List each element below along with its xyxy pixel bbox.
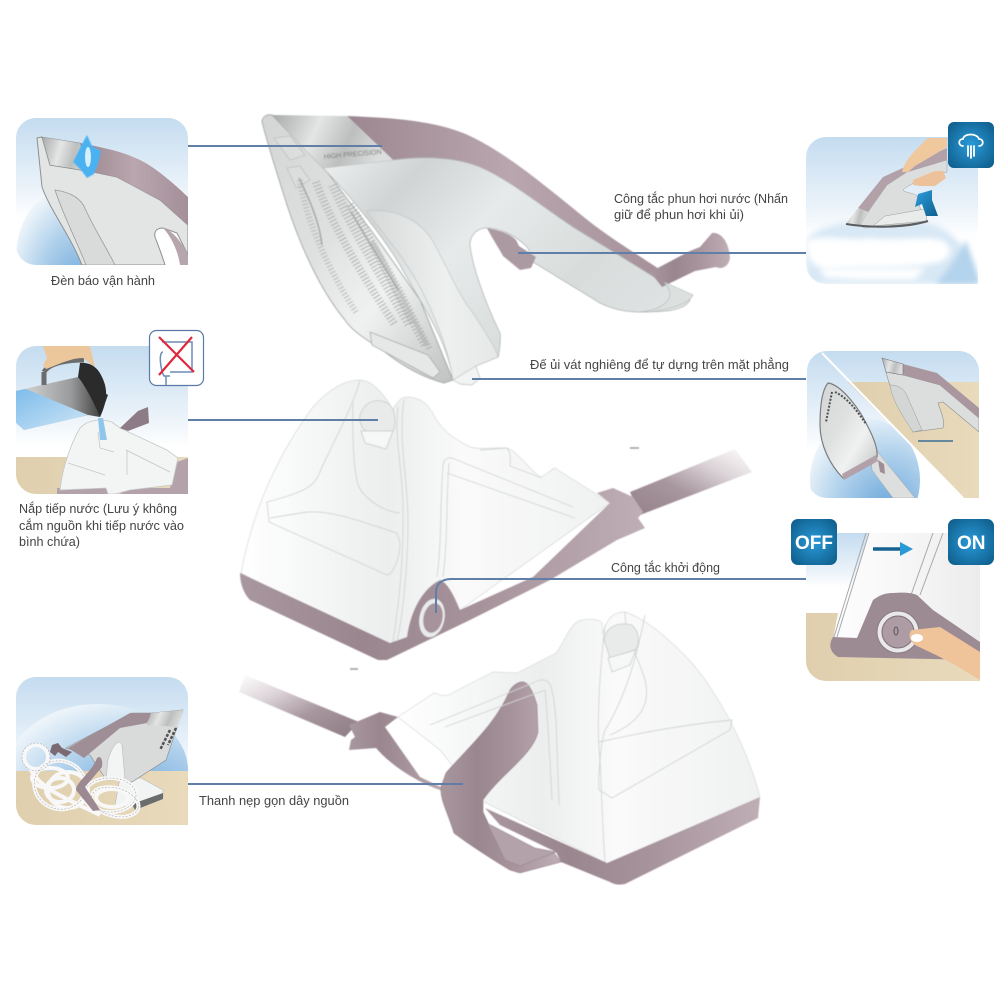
model label: HIGH PRECISION xyxy=(324,149,382,161)
panel: steam use xyxy=(806,137,980,284)
surface line xyxy=(918,440,953,442)
body edges xyxy=(834,533,943,637)
label: steam switch xyxy=(614,191,788,222)
label: water fill cap: cắm nguồn khi tiếp nước vào xyxy=(19,518,184,533)
steam lower xyxy=(820,268,925,280)
panel: power switch xyxy=(806,533,980,681)
sky divider xyxy=(822,353,963,498)
red cross xyxy=(159,337,194,375)
iron vents xyxy=(160,728,176,750)
main iron illustration xyxy=(262,115,730,385)
label: water fill cap: bình chứa) xyxy=(19,535,80,549)
fingernail xyxy=(911,634,923,642)
upper side panel xyxy=(890,385,922,432)
iron base xyxy=(115,778,163,807)
inner side panel xyxy=(366,211,498,380)
handle xyxy=(44,360,84,385)
blue corner xyxy=(935,240,980,284)
iron body xyxy=(66,710,183,782)
plum handle xyxy=(858,148,947,212)
arrow up xyxy=(915,190,938,216)
sand xyxy=(16,457,188,494)
lower sole vents xyxy=(826,392,866,424)
lower iron handle xyxy=(870,440,915,498)
base contour lines xyxy=(267,380,575,642)
hand xyxy=(43,346,95,369)
panel: cord storage xyxy=(8,677,188,836)
badge: OFF: OFF xyxy=(795,533,833,554)
cord wrap clip xyxy=(441,682,561,873)
trigger xyxy=(878,460,885,474)
sole xyxy=(846,221,928,227)
power cord xyxy=(630,449,752,515)
label: indicator light: Đèn báo vận hành xyxy=(51,274,155,288)
white tail xyxy=(106,742,125,780)
silver band xyxy=(42,136,82,170)
sand xyxy=(16,771,188,825)
upper iron body xyxy=(886,372,979,432)
indicator glow xyxy=(73,135,101,178)
steam dome xyxy=(806,220,978,284)
panel: heel rest xyxy=(807,351,979,498)
dome xyxy=(8,704,188,836)
speck xyxy=(630,447,639,449)
cord shading xyxy=(22,743,142,822)
panel: water filling xyxy=(15,346,188,494)
label: water fill cap xyxy=(19,501,184,549)
steam trigger xyxy=(487,228,536,270)
cord xyxy=(239,675,359,737)
power switch xyxy=(415,596,449,640)
dome xyxy=(810,420,920,498)
badge: ON: ON xyxy=(957,533,986,554)
steam cloud xyxy=(806,238,950,270)
plum housing xyxy=(830,593,980,660)
switch ring xyxy=(877,611,919,653)
lower iron sole xyxy=(820,383,877,478)
label: steam switch: Công tắc phun hơi nước (Nhấn xyxy=(614,191,788,206)
heel stand xyxy=(453,366,480,385)
label: steam switch: giữ để phun hơi khi ủi) xyxy=(614,208,744,222)
arm and collar xyxy=(349,712,450,795)
iron body xyxy=(37,137,188,265)
indicator core xyxy=(85,147,91,167)
base white body xyxy=(241,380,610,650)
silver panel xyxy=(272,115,393,168)
notch handle edge xyxy=(163,228,188,265)
base plum trim xyxy=(240,488,645,660)
iron body xyxy=(860,160,947,228)
badge: OFF xyxy=(791,519,837,565)
water cap xyxy=(604,624,638,672)
water tank base unit xyxy=(240,380,752,660)
base contour lines xyxy=(430,612,732,862)
wound cord xyxy=(24,745,142,822)
base plum bottom xyxy=(57,458,188,494)
sky xyxy=(806,533,868,613)
cord wrap base unit xyxy=(239,612,760,885)
sand xyxy=(848,382,979,498)
base white body xyxy=(60,420,178,494)
iron silver xyxy=(147,710,183,727)
upper silver xyxy=(882,358,903,375)
cord connector xyxy=(650,233,730,287)
water fill cap xyxy=(360,401,395,449)
label: heel rest: Đế ủi vát nghiêng để tự dựng trên mặt phẳng xyxy=(530,357,789,372)
tail cover xyxy=(640,282,693,312)
iron plum top xyxy=(68,713,152,758)
bottom plum trim xyxy=(485,797,760,885)
switch rocker xyxy=(882,616,914,648)
plum clip xyxy=(76,757,102,811)
iron handle xyxy=(347,116,672,282)
iron soleplate xyxy=(262,115,453,383)
label: cord wrap: Thanh nẹp gọn dây nguồn xyxy=(199,794,349,808)
speck xyxy=(350,668,358,670)
sand xyxy=(806,613,980,681)
side panel line xyxy=(55,190,115,265)
crossed socket xyxy=(160,342,192,385)
pitcher water xyxy=(15,389,88,430)
leader lines xyxy=(188,146,806,784)
cord connector xyxy=(50,743,72,757)
warning icon: do not fill while plugged xyxy=(150,330,204,386)
blue dome xyxy=(16,199,82,265)
side panel xyxy=(873,209,927,226)
water stream xyxy=(98,418,107,440)
base outlines xyxy=(68,432,170,475)
upper plum handle xyxy=(903,364,979,418)
label: power switch: Công tắc khởi động xyxy=(611,560,720,575)
silver nose xyxy=(846,208,868,225)
pitcher black back xyxy=(78,363,106,417)
arrow off to on xyxy=(873,542,913,556)
white body xyxy=(398,612,760,870)
hand top xyxy=(902,138,947,172)
badge: ON xyxy=(948,519,994,565)
label: water fill cap: Nắp tiếp nước (Lưu ý không xyxy=(19,501,177,516)
panel: indicator light xyxy=(16,118,188,265)
zero mark xyxy=(894,627,898,635)
pitcher body xyxy=(15,377,108,430)
plug connector xyxy=(120,407,149,431)
hand fingers xyxy=(913,171,946,186)
icon: steam badge xyxy=(948,122,994,168)
finger xyxy=(910,627,980,680)
plum handle xyxy=(80,143,188,225)
lower collar xyxy=(842,455,878,480)
iron body xyxy=(323,158,690,380)
